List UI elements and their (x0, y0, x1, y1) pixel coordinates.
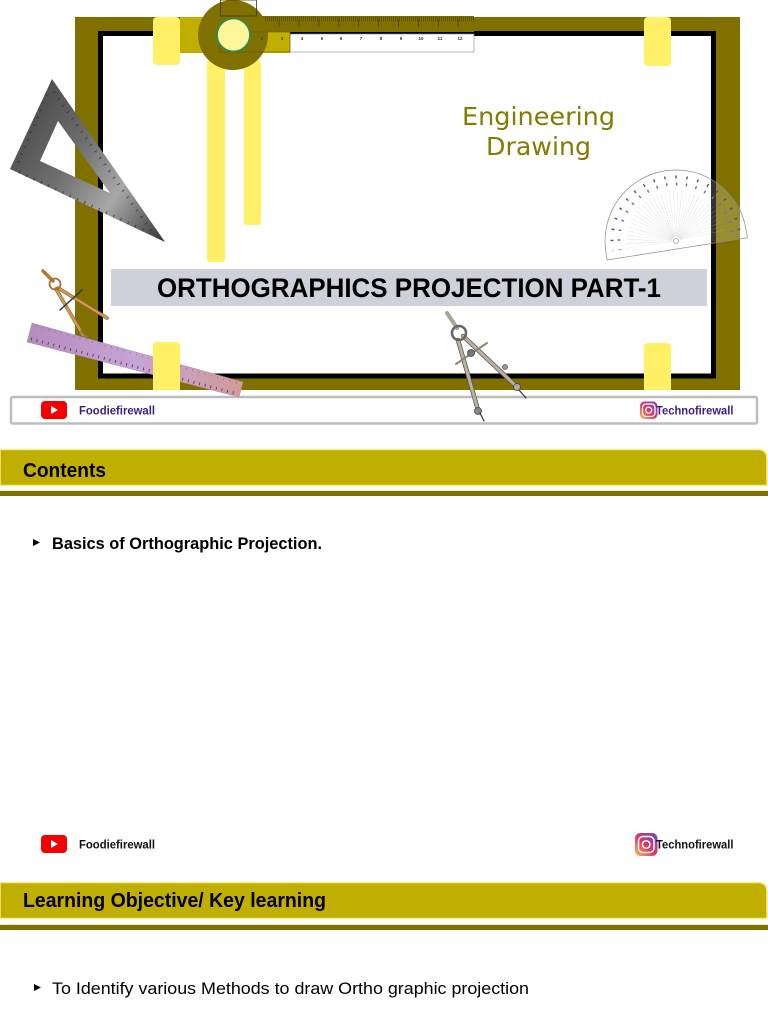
learning objective header bar: Learning Objective/ Key learning (23, 890, 326, 912)
Instagram handle: Technofirewall (656, 838, 734, 852)
section: contents (0, 450, 768, 553)
T-square pivot (198, 0, 290, 70)
top ruler: 8 (380, 36, 383, 41)
set square (10, 79, 165, 242)
social row (41, 833, 734, 856)
learning objective header bar (0, 882, 768, 930)
title bar: ORTHOGRAPHICS PROJECTION PART-1 (157, 273, 661, 303)
T-square pivot: 2 (261, 36, 264, 41)
drawing board frame (75, 17, 740, 390)
top ruler: 5 (321, 36, 324, 41)
top ruler: 3 (281, 36, 284, 41)
heading: Engineering Drawing: Engineering (462, 102, 615, 131)
contents header bar (0, 450, 768, 496)
channel name: Foodiefirewall (79, 404, 155, 418)
channel name: Foodiefirewall (79, 838, 155, 852)
top ruler: 10 (418, 36, 424, 41)
learning objective bullet: To Identify various Methods to draw Ortho graphic projection (52, 979, 529, 998)
top ruler: 4 (301, 36, 304, 41)
large steel compass (447, 313, 526, 421)
contents bullet: Basics of Orthographic Projection. (52, 535, 322, 553)
top ruler: 6 (340, 36, 343, 41)
small brown compass (43, 271, 107, 338)
heading: Engineering Drawing: Drawing (486, 132, 591, 161)
Instagram handle: Technofirewall (656, 404, 734, 418)
top ruler: 9 (400, 36, 403, 41)
contents header bar: Contents (23, 460, 106, 482)
section: learning objective (0, 882, 768, 998)
icon: YouTube (41, 401, 67, 419)
icon: Instagram (635, 833, 658, 856)
yellow clips (153, 17, 671, 390)
icon: YouTube (41, 835, 67, 853)
protractor (604, 170, 748, 260)
top ruler: 11 (438, 36, 443, 41)
top ruler: 12 (457, 36, 463, 41)
cover slide (10, 0, 757, 424)
icon: Instagram (640, 402, 658, 419)
yellow vertical strips (207, 60, 261, 262)
top ruler: 7 (360, 36, 363, 41)
social bar (11, 397, 757, 424)
top ruler (180, 16, 474, 53)
pink ruler (27, 323, 243, 397)
heading: Engineering Drawing (462, 102, 615, 161)
